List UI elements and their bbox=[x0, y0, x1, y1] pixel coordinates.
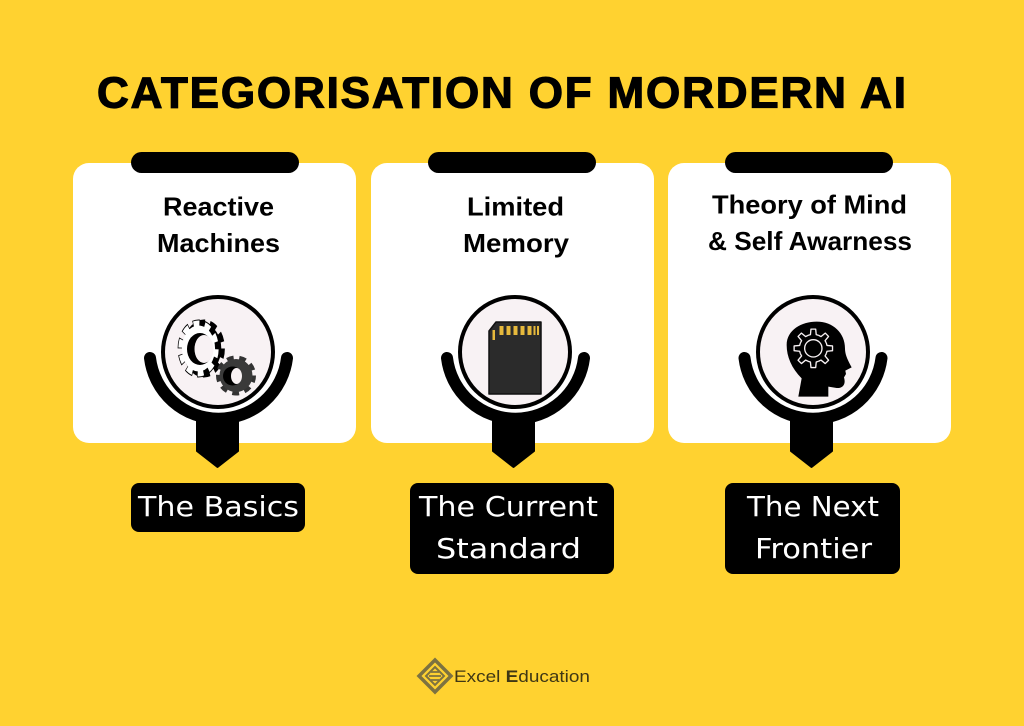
panel: limited memory bbox=[371, 152, 654, 467]
label: the current standard bbox=[410, 483, 614, 574]
label: the basics: The Basics bbox=[137, 490, 299, 523]
icon: memory card in cradle bbox=[447, 297, 584, 467]
label: the next frontier bbox=[725, 483, 900, 574]
label: the current standard: Standard bbox=[436, 532, 581, 565]
icon: memory card bbox=[489, 322, 541, 394]
panel: reactive machines bbox=[73, 152, 356, 467]
heading: limited memory: Memory bbox=[463, 228, 570, 258]
icon: head with gear in cradle bbox=[744, 297, 882, 467]
label: the current standard: The Current bbox=[418, 490, 598, 523]
title: CATEGORISATION OF MORDERN AI bbox=[97, 68, 906, 118]
heading: reactive machines: Machines bbox=[157, 228, 280, 258]
label: the next frontier: The Next bbox=[746, 490, 879, 523]
icon: dark gear bbox=[219, 358, 253, 392]
icon: head with gear bbox=[787, 322, 852, 397]
heading: reactive machines: Reactive bbox=[163, 192, 274, 222]
icon: diamond logo mark bbox=[419, 660, 451, 692]
heading: theory of mind and self awareness: & Self Awarness bbox=[708, 226, 912, 256]
heading: limited memory bbox=[463, 192, 570, 258]
heading: limited memory: Limited bbox=[467, 192, 564, 222]
icon: white gear bbox=[181, 324, 222, 373]
panel: theory of mind and self awareness bbox=[668, 152, 951, 467]
heading: theory of mind and self awareness: Theory of Mind bbox=[712, 190, 907, 220]
heading: reactive machines bbox=[157, 192, 280, 258]
icon: gears in cradle bbox=[150, 297, 287, 467]
logo: excel education bbox=[419, 660, 590, 692]
label: the basics bbox=[131, 483, 305, 532]
heading: theory of mind and self awareness bbox=[708, 190, 912, 256]
label: the next frontier: Frontier bbox=[755, 532, 873, 565]
logo: excel education: Excel Education bbox=[454, 667, 590, 686]
